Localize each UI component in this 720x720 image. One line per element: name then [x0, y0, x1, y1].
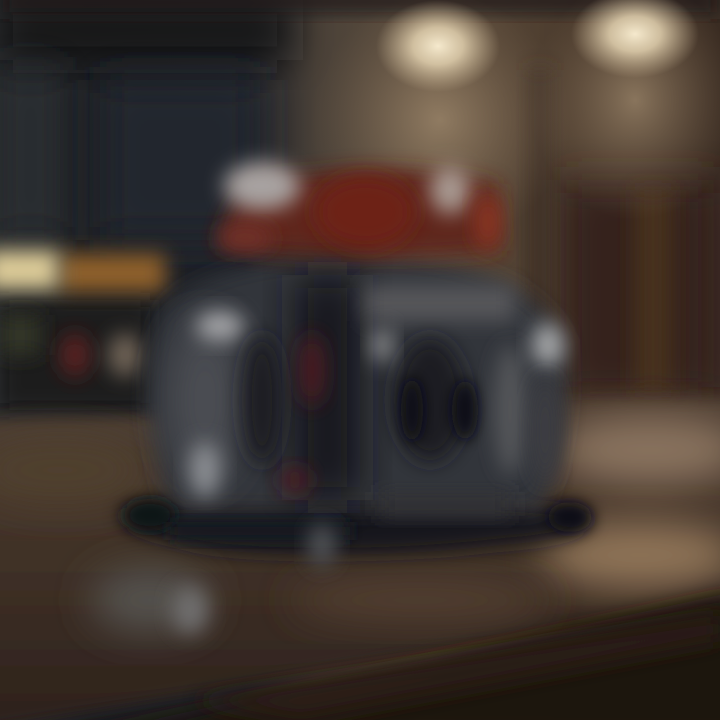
right drums [365, 285, 564, 516]
foot plate [124, 499, 592, 567]
red cap [217, 162, 502, 257]
wooden table [0, 400, 720, 720]
ceiling lights [310, 0, 720, 245]
left background lights and shelf [0, 250, 165, 410]
machine [120, 162, 592, 567]
left drum [167, 311, 282, 498]
machine body [151, 258, 566, 510]
dark central column [295, 275, 360, 500]
machine shadow base [120, 499, 591, 555]
